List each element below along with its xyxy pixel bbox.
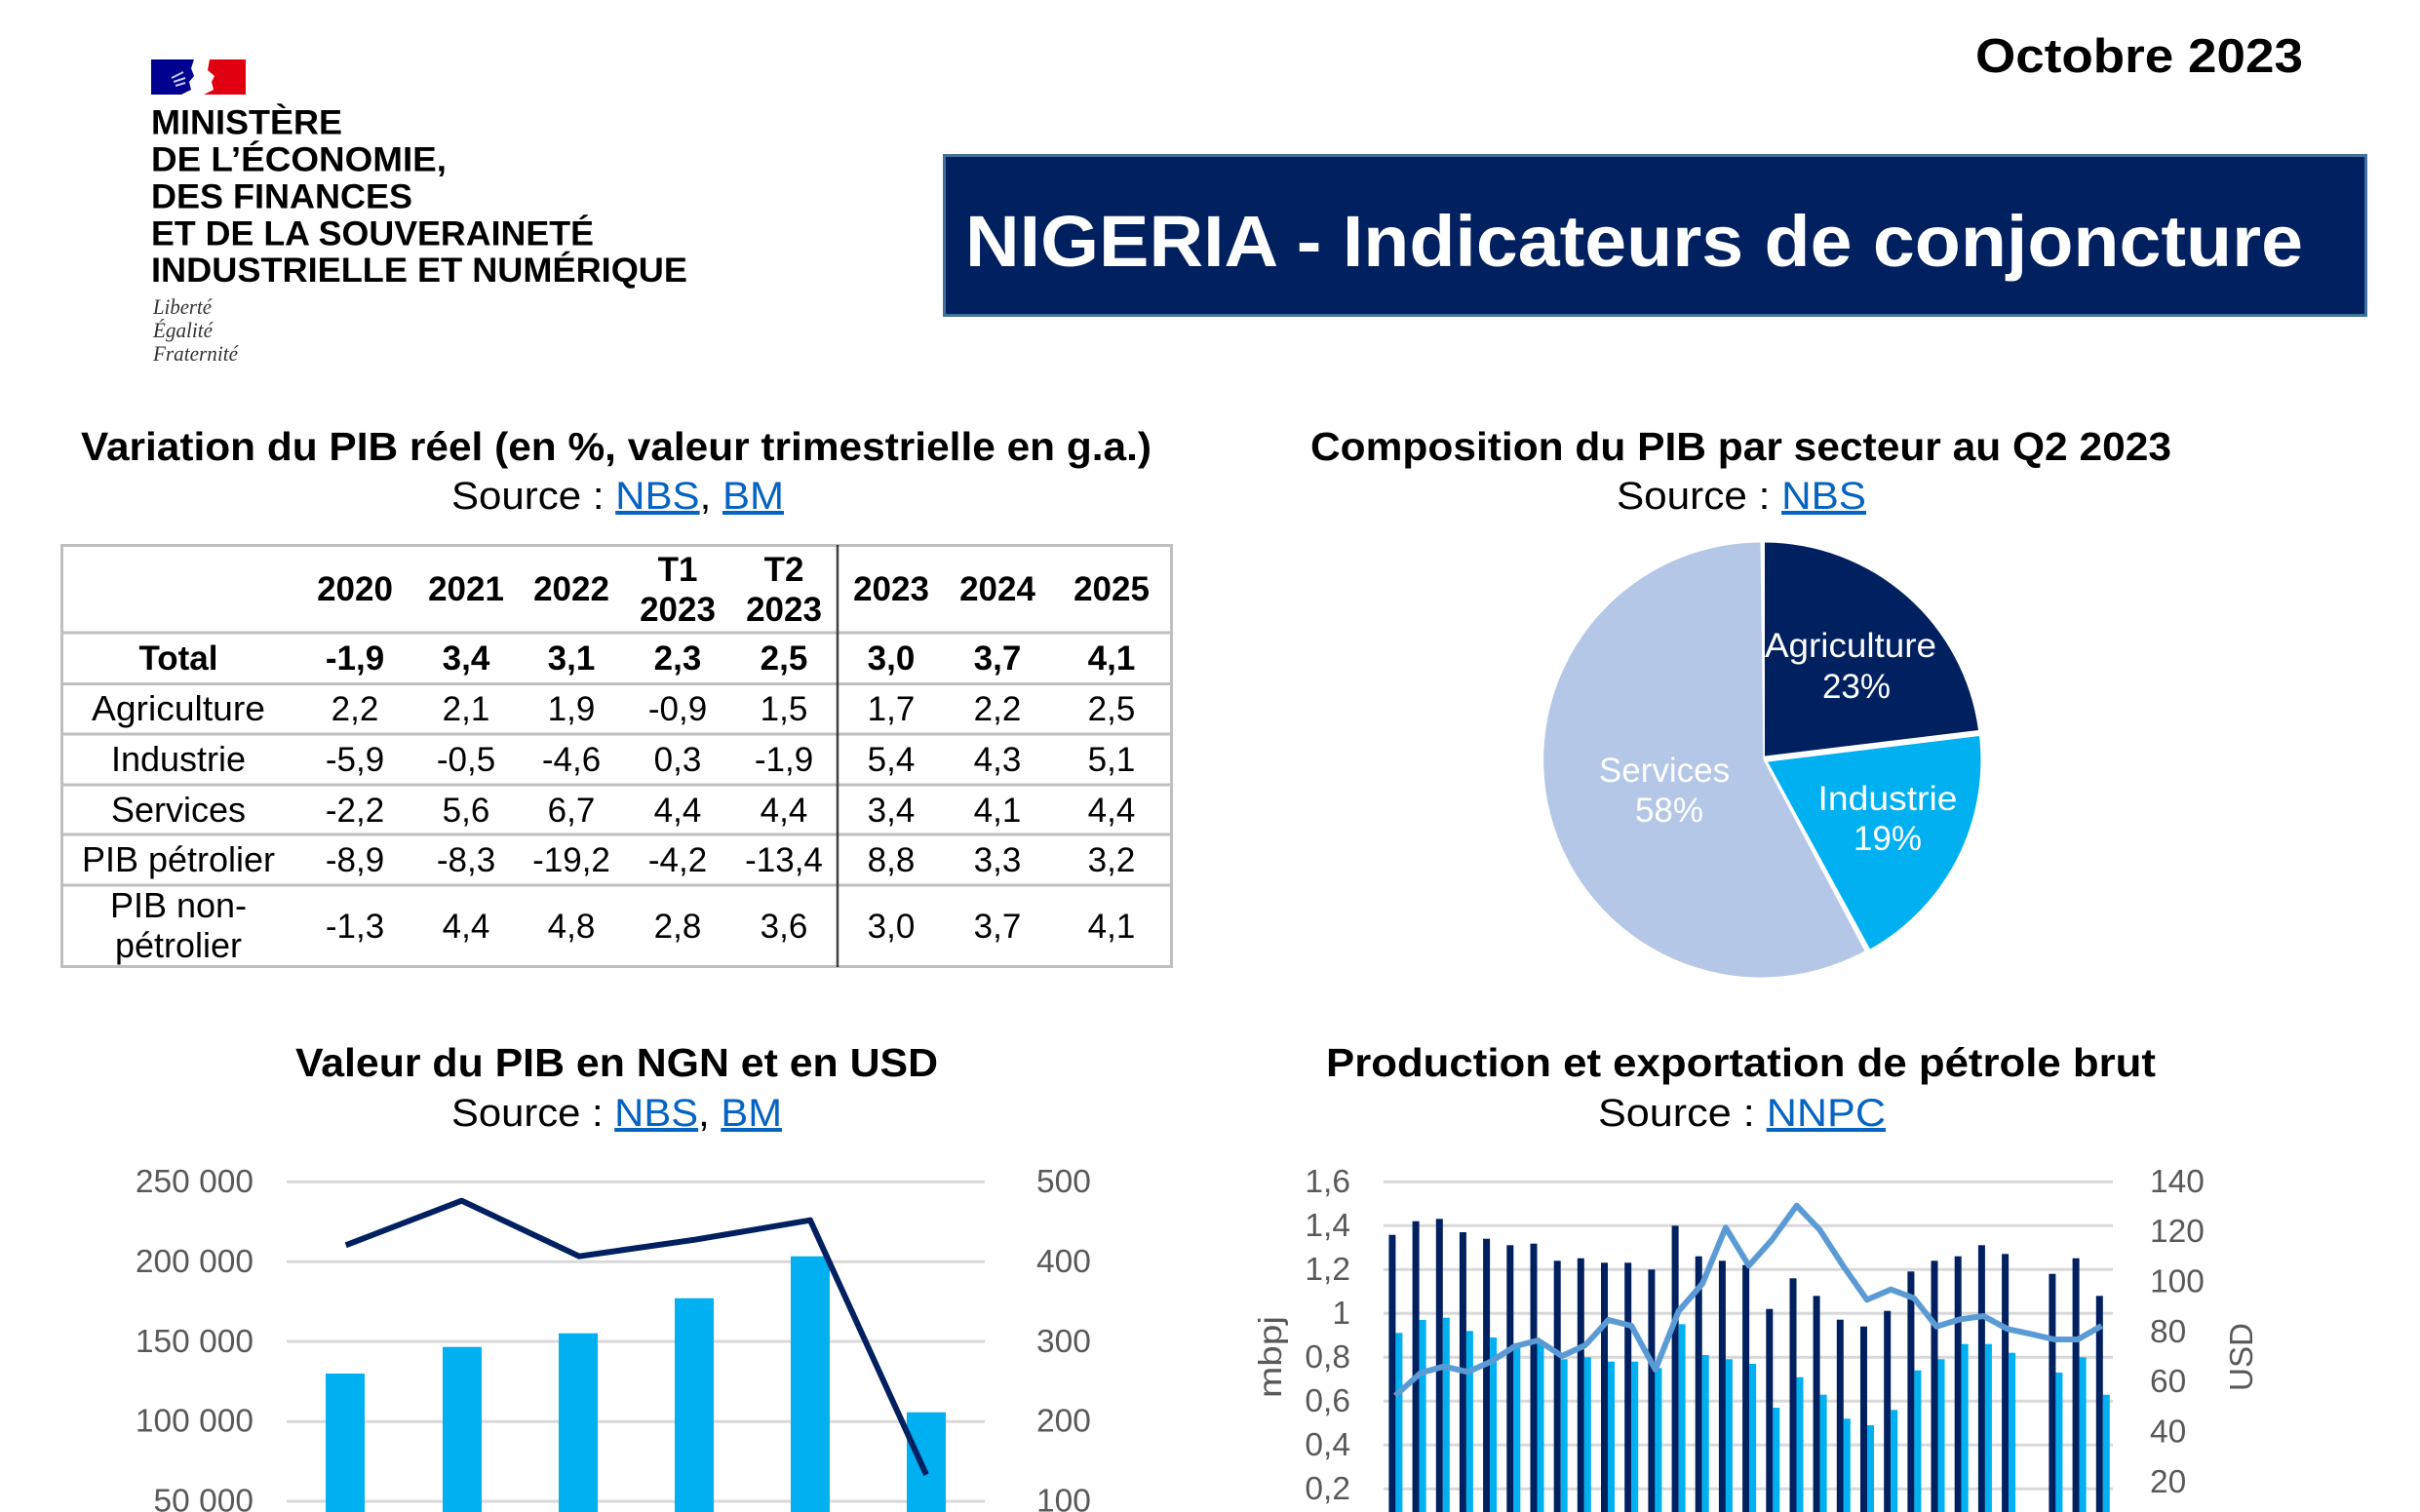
- production bars: [1388, 1219, 2103, 1512]
- row: PIB pétrolier: 8,8: [868, 841, 915, 879]
- row: PIB non-pétrolier: 3,7: [974, 908, 1021, 946]
- row: Total: 3,4: [443, 640, 490, 678]
- left axis: [1305, 1164, 1350, 1507]
- pie chart: 23%: [1822, 668, 1891, 706]
- row: Agriculture: 2,1: [443, 690, 489, 728]
- icon: Marianne flag: [151, 59, 246, 95]
- right axis: 60: [2150, 1364, 2186, 1400]
- row: PIB pétrolier: 3,3: [974, 841, 1021, 879]
- heading: Composition du PIB par secteur au Q2 2023: [1310, 424, 2171, 469]
- row: PIB pétrolier: [82, 839, 1135, 879]
- pie chart: [1543, 542, 1980, 977]
- row: Total: 4,1: [1088, 640, 1135, 678]
- row: PIB non-pétrolier: -1,3: [326, 908, 384, 946]
- row: PIB pétrolier: -13,4: [745, 841, 823, 879]
- row: PIB non-pétrolier: 2,8: [654, 908, 701, 946]
- axis title: USD: USD: [2224, 1323, 2260, 1391]
- title banner: [944, 156, 2365, 316]
- row: Services: 4,4: [761, 792, 807, 830]
- row: Industrie: -5,9: [326, 741, 384, 779]
- right axis: 140: [2150, 1164, 2205, 1200]
- row: PIB non-pétrolier: 4,8: [548, 908, 595, 946]
- panel: oil production chart: [1253, 1040, 2260, 1512]
- pie chart: Industrie: [1817, 780, 1958, 818]
- row: Services: 6,7: [548, 792, 595, 830]
- table header: 2024: [959, 570, 1035, 608]
- source: Source : NBS, BM: [451, 475, 784, 518]
- heading: Valeur du PIB en NGN et en USD: [295, 1040, 938, 1085]
- row: Industrie: -0,5: [437, 741, 495, 779]
- row: PIB non-pétrolier: 4,4: [443, 908, 489, 946]
- bar and line chart: [136, 1164, 1091, 1512]
- pie chart: Services: [1599, 752, 1730, 790]
- right axis: [1036, 1164, 1091, 1512]
- row: Total: -1,9: [326, 640, 384, 678]
- heading: Production et exportation de pétrole brut: [1326, 1040, 2156, 1085]
- row: Industrie: -4,6: [542, 741, 601, 779]
- row: Industrie: Industrie: [111, 739, 246, 779]
- row: Agriculture: 1,7: [868, 690, 915, 728]
- source: Source : NBS: [1617, 475, 1866, 518]
- date: Octobre 2023: [1975, 30, 2303, 83]
- row: Industrie: 4,3: [974, 741, 1021, 779]
- row: PIB pétrolier: -4,2: [648, 841, 707, 879]
- ministry name: DES FINANCES: [151, 177, 412, 216]
- oil price line: [1395, 1206, 2102, 1396]
- left axis: 150 000: [136, 1324, 254, 1360]
- row: Industrie: [111, 739, 1135, 779]
- table header: 2023: [640, 591, 716, 629]
- ministry name: DE L’ÉCONOMIE,: [151, 140, 447, 179]
- right axis: 120: [2150, 1214, 2205, 1250]
- row: Total: 2,3: [654, 640, 701, 678]
- row: Services: 4,4: [654, 792, 701, 830]
- left axis: 0,4: [1305, 1427, 1350, 1463]
- ministry name: ET DE LA SOUVERAINETÉ: [151, 214, 594, 253]
- row: PIB non-pétrolier: 4,1: [1088, 908, 1135, 946]
- table header: 2021: [428, 570, 504, 608]
- row: Agriculture: 1,9: [548, 690, 595, 728]
- right axis: 300: [1036, 1324, 1091, 1360]
- table header: 2023: [853, 570, 929, 608]
- row: Services: 4,1: [974, 792, 1021, 830]
- pie chart: 19%: [1854, 820, 1922, 858]
- source: Source : NBS, BM: [451, 1092, 782, 1135]
- left axis: 0,8: [1305, 1339, 1350, 1376]
- source: Source : NNPC: [1598, 1092, 1886, 1135]
- ministry name: INDUSTRIELLE ET NUMÉRIQUE: [151, 251, 687, 290]
- motto: Liberté: [152, 294, 213, 319]
- row: PIB pétrolier: 3,2: [1088, 841, 1135, 879]
- left axis: [136, 1164, 254, 1512]
- right axis: 500: [1036, 1164, 1091, 1200]
- ministry name: [151, 103, 687, 290]
- row: Services: 5,6: [443, 792, 489, 830]
- panel: GDP growth table: [61, 424, 1172, 967]
- row: Services: 3,4: [868, 792, 915, 830]
- row: Agriculture: 2,2: [974, 690, 1021, 728]
- row: Agriculture: 2,5: [1088, 690, 1135, 728]
- row: PIB pétrolier: -19,2: [532, 841, 610, 879]
- right axis: 200: [1036, 1404, 1091, 1439]
- heading: Variation du PIB réel (en %, valeur trimestrielle en g.a.): [81, 424, 1151, 469]
- table: [61, 545, 1172, 967]
- left axis: 0,6: [1305, 1383, 1350, 1419]
- motto: Fraternité: [152, 341, 239, 366]
- left axis: 100 000: [136, 1404, 254, 1439]
- row: Industrie: 5,4: [868, 741, 915, 779]
- export bars: [1395, 1318, 2110, 1512]
- row: Total: 3,7: [974, 640, 1021, 678]
- row: Total: 3,0: [868, 640, 915, 678]
- bars: [326, 1257, 946, 1512]
- left axis: 200 000: [136, 1244, 254, 1280]
- logo: ministry block: [151, 59, 687, 366]
- row: Agriculture: [92, 688, 1135, 728]
- table header: 2023: [746, 591, 822, 629]
- pie chart: Agriculture: [1765, 627, 1936, 665]
- right axis: 40: [2150, 1414, 2186, 1451]
- table header: 2025: [1073, 570, 1150, 608]
- table header: T1: [658, 551, 697, 589]
- left axis: 1,4: [1305, 1208, 1350, 1244]
- right axis: 80: [2150, 1314, 2186, 1350]
- row: PIB non-pétrolier: [110, 885, 1135, 965]
- row: PIB pétrolier: PIB pétrolier: [82, 839, 275, 879]
- panel: GDP composition pie: [1310, 424, 2171, 977]
- title banner: NIGERIA - Indicateurs de conjoncture: [965, 201, 2303, 282]
- left axis: 1,6: [1305, 1164, 1350, 1200]
- left axis: 1: [1332, 1296, 1350, 1332]
- right axis: 400: [1036, 1244, 1091, 1280]
- row: PIB non-pétrolier: pétrolier: [115, 925, 242, 965]
- row: Services: [111, 790, 1135, 830]
- bar and line chart: [1253, 1164, 2260, 1512]
- table header: 2022: [533, 570, 609, 608]
- panel: GDP value chart: [136, 1040, 1091, 1512]
- motto: Égalité: [152, 318, 214, 342]
- row: Total: 2,5: [761, 640, 807, 678]
- right axis: [2150, 1164, 2205, 1500]
- right axis: 100: [2150, 1263, 2205, 1300]
- table header: [317, 551, 1150, 629]
- row: Industrie: 0,3: [654, 741, 701, 779]
- row: Industrie: -1,9: [755, 741, 813, 779]
- row: Agriculture: 2,2: [332, 690, 378, 728]
- left axis: 1,2: [1305, 1252, 1350, 1288]
- motto: [152, 294, 239, 366]
- row: PIB pétrolier: -8,3: [437, 841, 495, 879]
- line: [346, 1201, 926, 1475]
- axis title: mbpj: mbpj: [1253, 1316, 1289, 1398]
- row: Agriculture: Agriculture: [92, 688, 265, 728]
- row: PIB non-pétrolier: 3,0: [868, 908, 915, 946]
- row: Total: [138, 640, 1135, 678]
- row: Total: 3,1: [548, 640, 595, 678]
- row: PIB non-pétrolier: 3,6: [761, 908, 807, 946]
- row: PIB non-pétrolier: PIB non-: [110, 885, 247, 925]
- right axis: 20: [2150, 1464, 2186, 1500]
- ministry name: MINISTÈRE: [151, 103, 342, 142]
- pie chart: 58%: [1635, 792, 1703, 830]
- row: Services: Services: [111, 790, 246, 830]
- row: Services: 4,4: [1088, 792, 1135, 830]
- table header: T2: [764, 551, 803, 589]
- row: Total: Total: [138, 640, 218, 678]
- row: Industrie: 5,1: [1088, 741, 1135, 779]
- table header: 2020: [317, 570, 393, 608]
- row: Services: -2,2: [326, 792, 384, 830]
- row: Agriculture: -0,9: [648, 690, 707, 728]
- left axis: 0,2: [1305, 1471, 1350, 1507]
- row: Agriculture: 1,5: [761, 690, 807, 728]
- left axis: 250 000: [136, 1164, 254, 1200]
- row: PIB pétrolier: -8,9: [326, 841, 384, 879]
